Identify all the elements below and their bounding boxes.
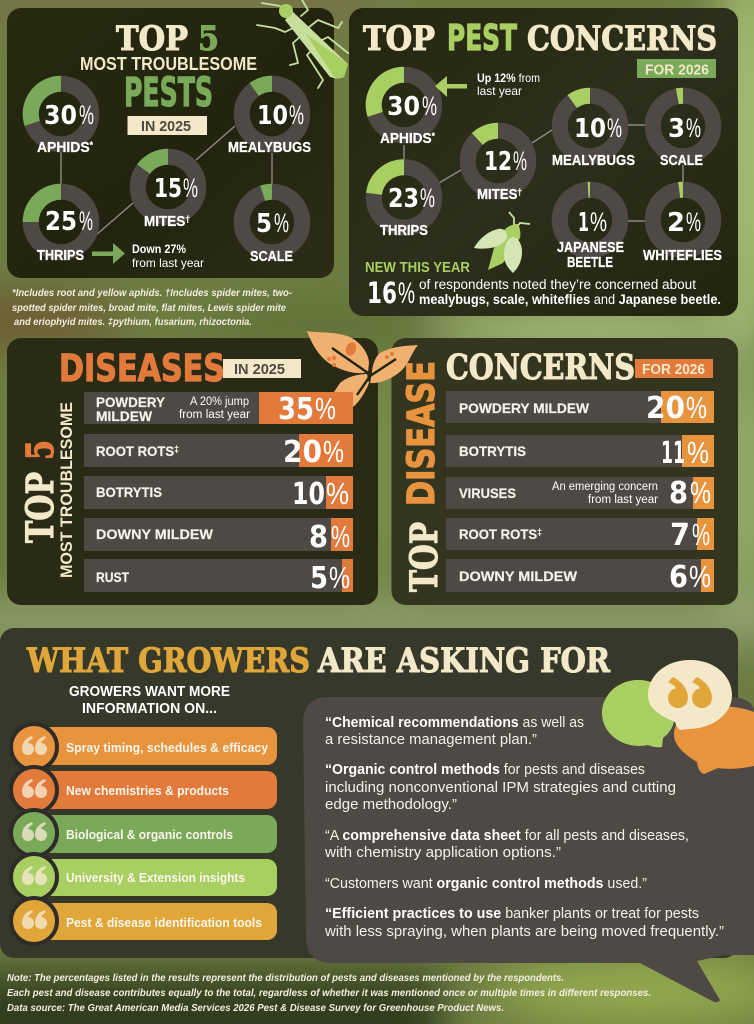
donut: aphids 30%: APHIDS xyxy=(380,131,435,147)
pill: new chemistries xyxy=(11,767,277,813)
donut: aphids 30%: 30 xyxy=(44,101,77,131)
donut: mites 12%: % xyxy=(513,146,527,176)
bar: viruses 8%: % xyxy=(690,475,711,510)
donut: scale 5%: 5 xyxy=(256,209,272,239)
bar: powdery mildew 20% xyxy=(446,390,714,426)
bar: powdery mildew 35%: from last year xyxy=(179,409,250,421)
pill: university insights: University & Extension insights xyxy=(66,870,245,885)
bar: rust 5%: 5 xyxy=(310,561,328,596)
pill: university insights xyxy=(11,854,277,900)
pill: biological controls: Biological & organic controls xyxy=(66,827,233,842)
donut: mealybugs 10%: 10 xyxy=(574,114,606,144)
icon: chat bubbles with quotation mark xyxy=(602,660,754,774)
bar: downy mildew 6%: DOWNY MILDEW xyxy=(459,569,577,584)
donut: scale 5%: % xyxy=(274,208,289,238)
bar: root rots 20%: 20 xyxy=(283,435,322,470)
quote: chemical recommendations: “Chemical recommendations as well as xyxy=(325,715,584,731)
bar: downy mildew 6%: % xyxy=(689,559,711,594)
quote: organic control methods xyxy=(325,762,676,813)
footnotes: pests: *Includes root and yellow aphids. †Includes spider mites, two- xyxy=(12,288,293,299)
panel: top disease concerns background xyxy=(392,338,738,605)
donut: mealybugs 10%: MEALYBUGS xyxy=(552,153,635,169)
bar: viruses 8%: from last year xyxy=(588,494,658,506)
bar: botrytis 10% xyxy=(84,476,353,512)
donut: whiteflies 2%: WHITEFLIES xyxy=(643,248,722,264)
callout: down 27% from last year: from last year xyxy=(132,256,204,270)
donut: mites 12%: † xyxy=(517,187,522,197)
quote: organic control methods: “Organic control methods for pests and diseases xyxy=(325,762,645,778)
donut: scale 3%: % xyxy=(686,113,701,143)
panel: top pest concerns xyxy=(349,8,738,316)
bar: botrytis 11%: % xyxy=(687,435,709,470)
notes and data source: Note: The percentages listed in the results represent the distribution of pests and diseases mentioned by the respondents. xyxy=(7,973,564,984)
bar: root rots 7%: ROOT ROTS xyxy=(459,527,539,542)
donut: mites 15%: % xyxy=(183,173,198,203)
heading: what growers are asking for: WHAT GROWERS xyxy=(26,641,310,681)
bar: viruses 8%: VIRUSES xyxy=(459,486,516,501)
quote: efficient practices xyxy=(324,906,724,940)
heading: concerns: CONCERNS xyxy=(446,347,635,388)
donut: scale 3%: 3 xyxy=(668,114,685,144)
bar: powdery mildew 20%: 20 xyxy=(646,391,685,426)
footnotes: pests: and eriophyid mites. ‡pythium, fusarium, rhizoctonia. xyxy=(14,317,252,328)
vertical heading: top disease: TOP xyxy=(402,522,446,592)
donut: japanese beetle 1% xyxy=(557,188,624,271)
pill: spray timing xyxy=(11,724,277,770)
bar: viruses 8%: 8 xyxy=(669,476,688,511)
callout: up 12% from last year: Up 12% from xyxy=(477,71,540,85)
donut: mites 15% xyxy=(126,145,210,230)
bar: root rots 7%: ‡ xyxy=(537,527,542,537)
subheading: most troublesome: MOST TROUBLESOME xyxy=(80,54,257,74)
quote: organic control methods: edge methodology.” xyxy=(325,797,457,813)
vertical heading: top 5 most troublesome: TOP xyxy=(18,472,62,543)
stat: 16% of respondents: of respondents noted they’re concerned about xyxy=(419,277,696,292)
bar: powdery mildew 35%: MILDEW xyxy=(96,409,152,424)
heading: what growers are asking for xyxy=(26,641,611,681)
vertical heading: top 5 most troublesome: 5 xyxy=(18,440,62,460)
bar: downy mildew 8% xyxy=(84,518,353,555)
bar: viruses 8% xyxy=(446,475,714,511)
subheading: growers want more information on: INFORMATION ON... xyxy=(82,701,217,717)
heading: top pest concerns: CONCERNS xyxy=(527,19,717,59)
donut: whiteflies 2%: % xyxy=(686,207,701,237)
bar: botrytis 11%: BOTRYTIS xyxy=(459,444,526,459)
donut: aphids 30% xyxy=(366,67,442,147)
bar: downy mildew 8%: 8 xyxy=(309,520,328,555)
pill: pest identification: Pest & disease identification tools xyxy=(66,915,262,930)
bar: botrytis 11% xyxy=(446,435,714,471)
tag: in 2025: IN 2025 xyxy=(141,119,191,135)
tag: for 2026: FOR 2026 xyxy=(645,62,709,78)
donut: mealybugs 10%: MEALYBUGS xyxy=(228,140,311,156)
stat: 16% of respondents: mealybugs, scale, whiteflies and Japanese beetle. xyxy=(419,292,721,307)
pill: pest identification xyxy=(11,898,277,944)
notes and data source xyxy=(7,973,651,1014)
tag: for 2026: FOR 2026 xyxy=(642,362,705,378)
donut: scale 5%: SCALE xyxy=(250,249,293,265)
vertical heading: top disease: DISEASE xyxy=(400,361,443,506)
arrow: down 27% xyxy=(92,243,125,264)
donut: aphids 30%: * xyxy=(432,131,435,141)
bar: powdery mildew 20%: POWDERY MILDEW xyxy=(459,401,589,416)
bar: rust 5% xyxy=(84,559,353,596)
notes and data source: Data source: The Great American Media Services 2026 Pest & Disease Survey for Greenhouse Product News. xyxy=(7,1003,504,1014)
heading: top 5: 5 xyxy=(198,19,219,59)
quote: organic control methods: including nonconventional IPM strategies and cutting xyxy=(325,780,676,796)
donut: mealybugs 10%: % xyxy=(289,100,304,130)
icon: grasshopper xyxy=(257,0,360,88)
bar: root rots 20%: ‡ xyxy=(174,444,179,454)
donut: aphids 30%: % xyxy=(422,91,437,121)
pill: spray timing: Spray timing, schedules & efficacy xyxy=(66,740,269,755)
donut: thrips 23%: 23 xyxy=(388,184,419,214)
donut: japanese beetle 1%: 1 xyxy=(578,208,589,238)
bar: powdery mildew 35%: % xyxy=(315,391,336,426)
donut: japanese beetle 1%: JAPANESE xyxy=(557,240,624,256)
donut: mites 12%: MITES xyxy=(477,187,521,203)
label: new this year: NEW THIS YEAR xyxy=(365,260,470,276)
donut: aphids 30%: 30 xyxy=(387,92,420,122)
panel: what growers are asking for xyxy=(0,628,738,958)
bar: botrytis 10%: 10 xyxy=(292,477,325,512)
pill: biological controls xyxy=(11,810,277,856)
heading: top 5: TOP xyxy=(116,19,188,59)
quote: comprehensive data sheet xyxy=(324,828,689,861)
bar: powdery mildew 35%: 35 xyxy=(278,392,314,427)
donut: aphids 30%: APHIDS xyxy=(37,140,92,156)
tag: for 2026 xyxy=(637,59,716,78)
bar: rust 5%: % xyxy=(329,560,350,595)
quote: customers want: “Customers want organic control methods used.” xyxy=(325,876,647,892)
donut: mealybugs 10%: % xyxy=(607,113,622,143)
bar: powdery mildew 35%: POWDERY xyxy=(96,395,165,410)
footnotes: pests: spotted spider mites, broad mite, flat mites, Lewis spider mite xyxy=(12,303,286,314)
connector lines xyxy=(404,125,683,221)
tag: in 2025 xyxy=(128,116,207,135)
tag: in 2025 xyxy=(223,359,301,378)
bar: powdery mildew 35%: A 20% jump xyxy=(190,396,249,408)
donut: mites 15%: MITES xyxy=(144,214,188,230)
donut: japanese beetle 1%: % xyxy=(590,207,607,237)
bar: powdery mildew 20%: % xyxy=(686,390,707,425)
bar: botrytis 10%: BOTRYTIS xyxy=(96,485,162,500)
bar: botrytis 11%: 11 xyxy=(661,436,685,471)
donut: thrips 23%: % xyxy=(420,183,435,213)
quote: chemical recommendations xyxy=(325,715,584,748)
bar: root rots 20%: % xyxy=(323,434,344,469)
donut: mealybugs 10% xyxy=(228,72,314,156)
donut: mealybugs 10% xyxy=(548,84,635,169)
bar: downy mildew 6% xyxy=(446,559,714,595)
bar: rust 5%: RUST xyxy=(96,570,130,585)
subheading: growers want more information on: GROWERS WANT MORE xyxy=(69,684,230,700)
bar: downy mildew 8%: DOWNY MILDEW xyxy=(96,527,213,542)
donut: scale 5% xyxy=(234,184,310,265)
donut: thrips 23%: THRIPS xyxy=(380,223,428,239)
bar: downy mildew 6%: 6 xyxy=(669,560,688,595)
arrow: up 12% xyxy=(435,76,467,97)
heading: diseases: DISEASES xyxy=(59,347,225,390)
donut: aphids 30%: % xyxy=(79,100,94,130)
bar: downy mildew 8%: % xyxy=(331,519,350,554)
vertical heading: top disease xyxy=(400,361,446,592)
bar: botrytis 10%: % xyxy=(326,476,349,511)
bar: root rots 20%: ROOT ROTS xyxy=(96,444,176,459)
donut: japanese beetle 1%: BEETLE xyxy=(567,255,613,271)
stat: 16% of respondents: % xyxy=(398,277,415,310)
callout: down 27% from last year xyxy=(132,244,204,270)
donut: aphids 30%: * xyxy=(90,140,93,150)
donut: aphids 30% xyxy=(23,76,99,156)
donut: mealybugs 10%: 10 xyxy=(257,101,288,131)
donut: mites 15%: † xyxy=(185,214,190,224)
subheading: growers want more information on xyxy=(69,684,230,717)
donut: thrips 23% xyxy=(370,164,438,239)
bar: root rots 7% xyxy=(446,517,714,553)
speech bubble: grower quotes xyxy=(303,697,754,1002)
heading: what growers are asking for: ARE ASKING FOR xyxy=(317,641,611,681)
donut: mites 12% xyxy=(455,118,541,204)
donut: whiteflies 2%: 2 xyxy=(667,208,685,238)
bar: root rots 20% xyxy=(84,434,353,470)
quote: efficient practices: with less spraying, when plants are being moved frequently.” xyxy=(324,924,724,940)
callout: up 12% from last year xyxy=(477,71,540,98)
donut: mites 12%: 12 xyxy=(484,147,512,177)
heading: top pest concerns: TOP xyxy=(363,19,435,59)
bar: powdery mildew 35% xyxy=(84,391,353,427)
quote: comprehensive data sheet: with chemistry application options.” xyxy=(324,845,561,861)
donut: scale 3%: SCALE xyxy=(660,153,703,169)
stat: 16% of respondents: 16 xyxy=(367,276,397,310)
donut: thrips 25% xyxy=(31,192,93,264)
stat: 16% of respondents xyxy=(367,276,721,310)
tag: in 2025: IN 2025 xyxy=(234,362,285,378)
vertical heading: top 5 most troublesome: MOST TROUBLESOME xyxy=(58,402,76,578)
panel: top 5 most troublesome diseases xyxy=(7,338,378,605)
callout: up 12% from last year: last year xyxy=(477,84,522,98)
donut: thrips 25%: 25 xyxy=(45,207,77,237)
icon: orange leaves xyxy=(307,331,418,410)
pill: new chemistries: New chemistries & products xyxy=(66,783,229,798)
callout: down 27% from last year: Down 27% xyxy=(132,244,186,256)
quote: efficient practices: “Efficient practices to use banker plants or treat for pests xyxy=(325,906,699,922)
bar: viruses 8%: An emerging concern xyxy=(552,481,658,493)
notes and data source: Each pest and disease contributes equally to the total, regardless of whether it was mentioned once or multiple times in different responses. xyxy=(7,988,651,999)
connector lines xyxy=(61,126,272,235)
icon: whitefly xyxy=(474,212,530,273)
panel: top 5 most troublesome pests xyxy=(7,8,334,278)
heading: top pest concerns xyxy=(363,18,717,59)
bar: root rots 7%: 7 xyxy=(670,518,690,553)
quote: comprehensive data sheet: “A comprehensive data sheet for all pests and diseases, xyxy=(325,828,689,844)
quote: chemical recommendations: a resistance management plan.” xyxy=(325,732,537,748)
donut: scale 3% xyxy=(648,91,718,169)
donut: thrips 25%: THRIPS xyxy=(37,248,84,264)
donut: whiteflies 2% xyxy=(643,186,722,264)
vertical heading: top 5 most troublesome xyxy=(18,402,76,578)
footnotes: pests xyxy=(12,288,293,328)
donut: thrips 25%: % xyxy=(79,206,93,236)
heading: pests: PESTS xyxy=(124,70,213,116)
bar: root rots 7%: % xyxy=(692,517,710,552)
heading: top pest concerns: PEST xyxy=(447,18,517,59)
donut: mites 15%: 15 xyxy=(154,174,182,204)
